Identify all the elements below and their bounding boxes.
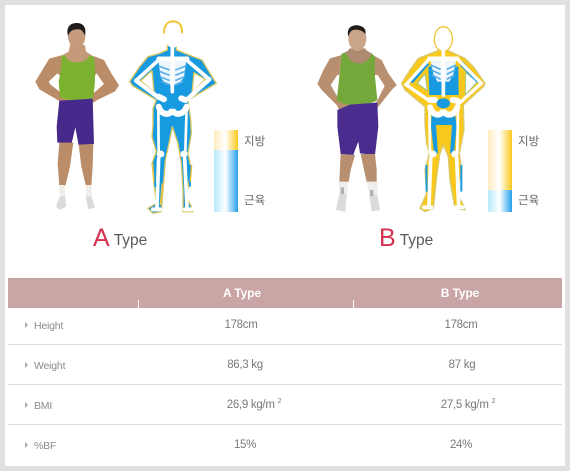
- heading: B Type: B Type: [379, 224, 433, 252]
- table header: B Type: B Type: [441, 286, 479, 300]
- legend B: fat label: 지방: [518, 136, 539, 148]
- body silhouette: [402, 43, 485, 212]
- bones: [406, 43, 481, 207]
- diagram: B type body composition: [402, 27, 485, 212]
- row marker: BMI: [25, 402, 28, 408]
- row marker: Weight: [25, 362, 28, 368]
- row label: BMI: BMI: [34, 400, 52, 412]
- B Type height: 178cm: [444, 319, 478, 331]
- row label: Weight: Weight: [34, 360, 65, 372]
- A Type weight: 86,3 kg: [227, 359, 263, 371]
- legend A: fat bar: [214, 130, 238, 150]
- bones: [136, 43, 209, 209]
- A Type body fat: 15%: [234, 439, 256, 451]
- B Type BMI: 27,5 kg/m 2: [441, 398, 495, 411]
- ribcage: [158, 57, 187, 85]
- shin muscle and fat: [154, 165, 190, 187]
- row marker: %BF: [25, 442, 28, 448]
- heading: A Type: A Type: [93, 224, 147, 252]
- row marker: Height: [25, 322, 28, 328]
- A Type height: 178cm: [224, 319, 258, 331]
- ribcage: [430, 57, 457, 82]
- B Type weight: 87 kg: [449, 359, 475, 371]
- legend A: muscle bar: [214, 150, 238, 212]
- legend A: fat label: 지방: [244, 136, 265, 148]
- legend B: muscle bar: [488, 190, 512, 212]
- A Type BMI: 26,9 kg/m 2: [227, 398, 281, 411]
- photo: B type man: [317, 25, 397, 212]
- photo: A type man: [35, 23, 119, 210]
- table header bar: [8, 278, 562, 308]
- shin muscle: [426, 165, 461, 192]
- legend B: muscle label: 근육: [518, 195, 539, 207]
- muscle areas: [409, 61, 480, 83]
- row label: Height: Height: [34, 320, 63, 332]
- diagram: A type body composition: [130, 21, 216, 213]
- B Type body fat: 24%: [450, 439, 472, 451]
- table header: A Type: A Type: [223, 286, 261, 300]
- row label: %BF: %BF: [34, 440, 56, 452]
- legend A: muscle label: 근육: [244, 195, 265, 207]
- body silhouette: [130, 43, 216, 213]
- legend B: fat bar: [488, 130, 512, 190]
